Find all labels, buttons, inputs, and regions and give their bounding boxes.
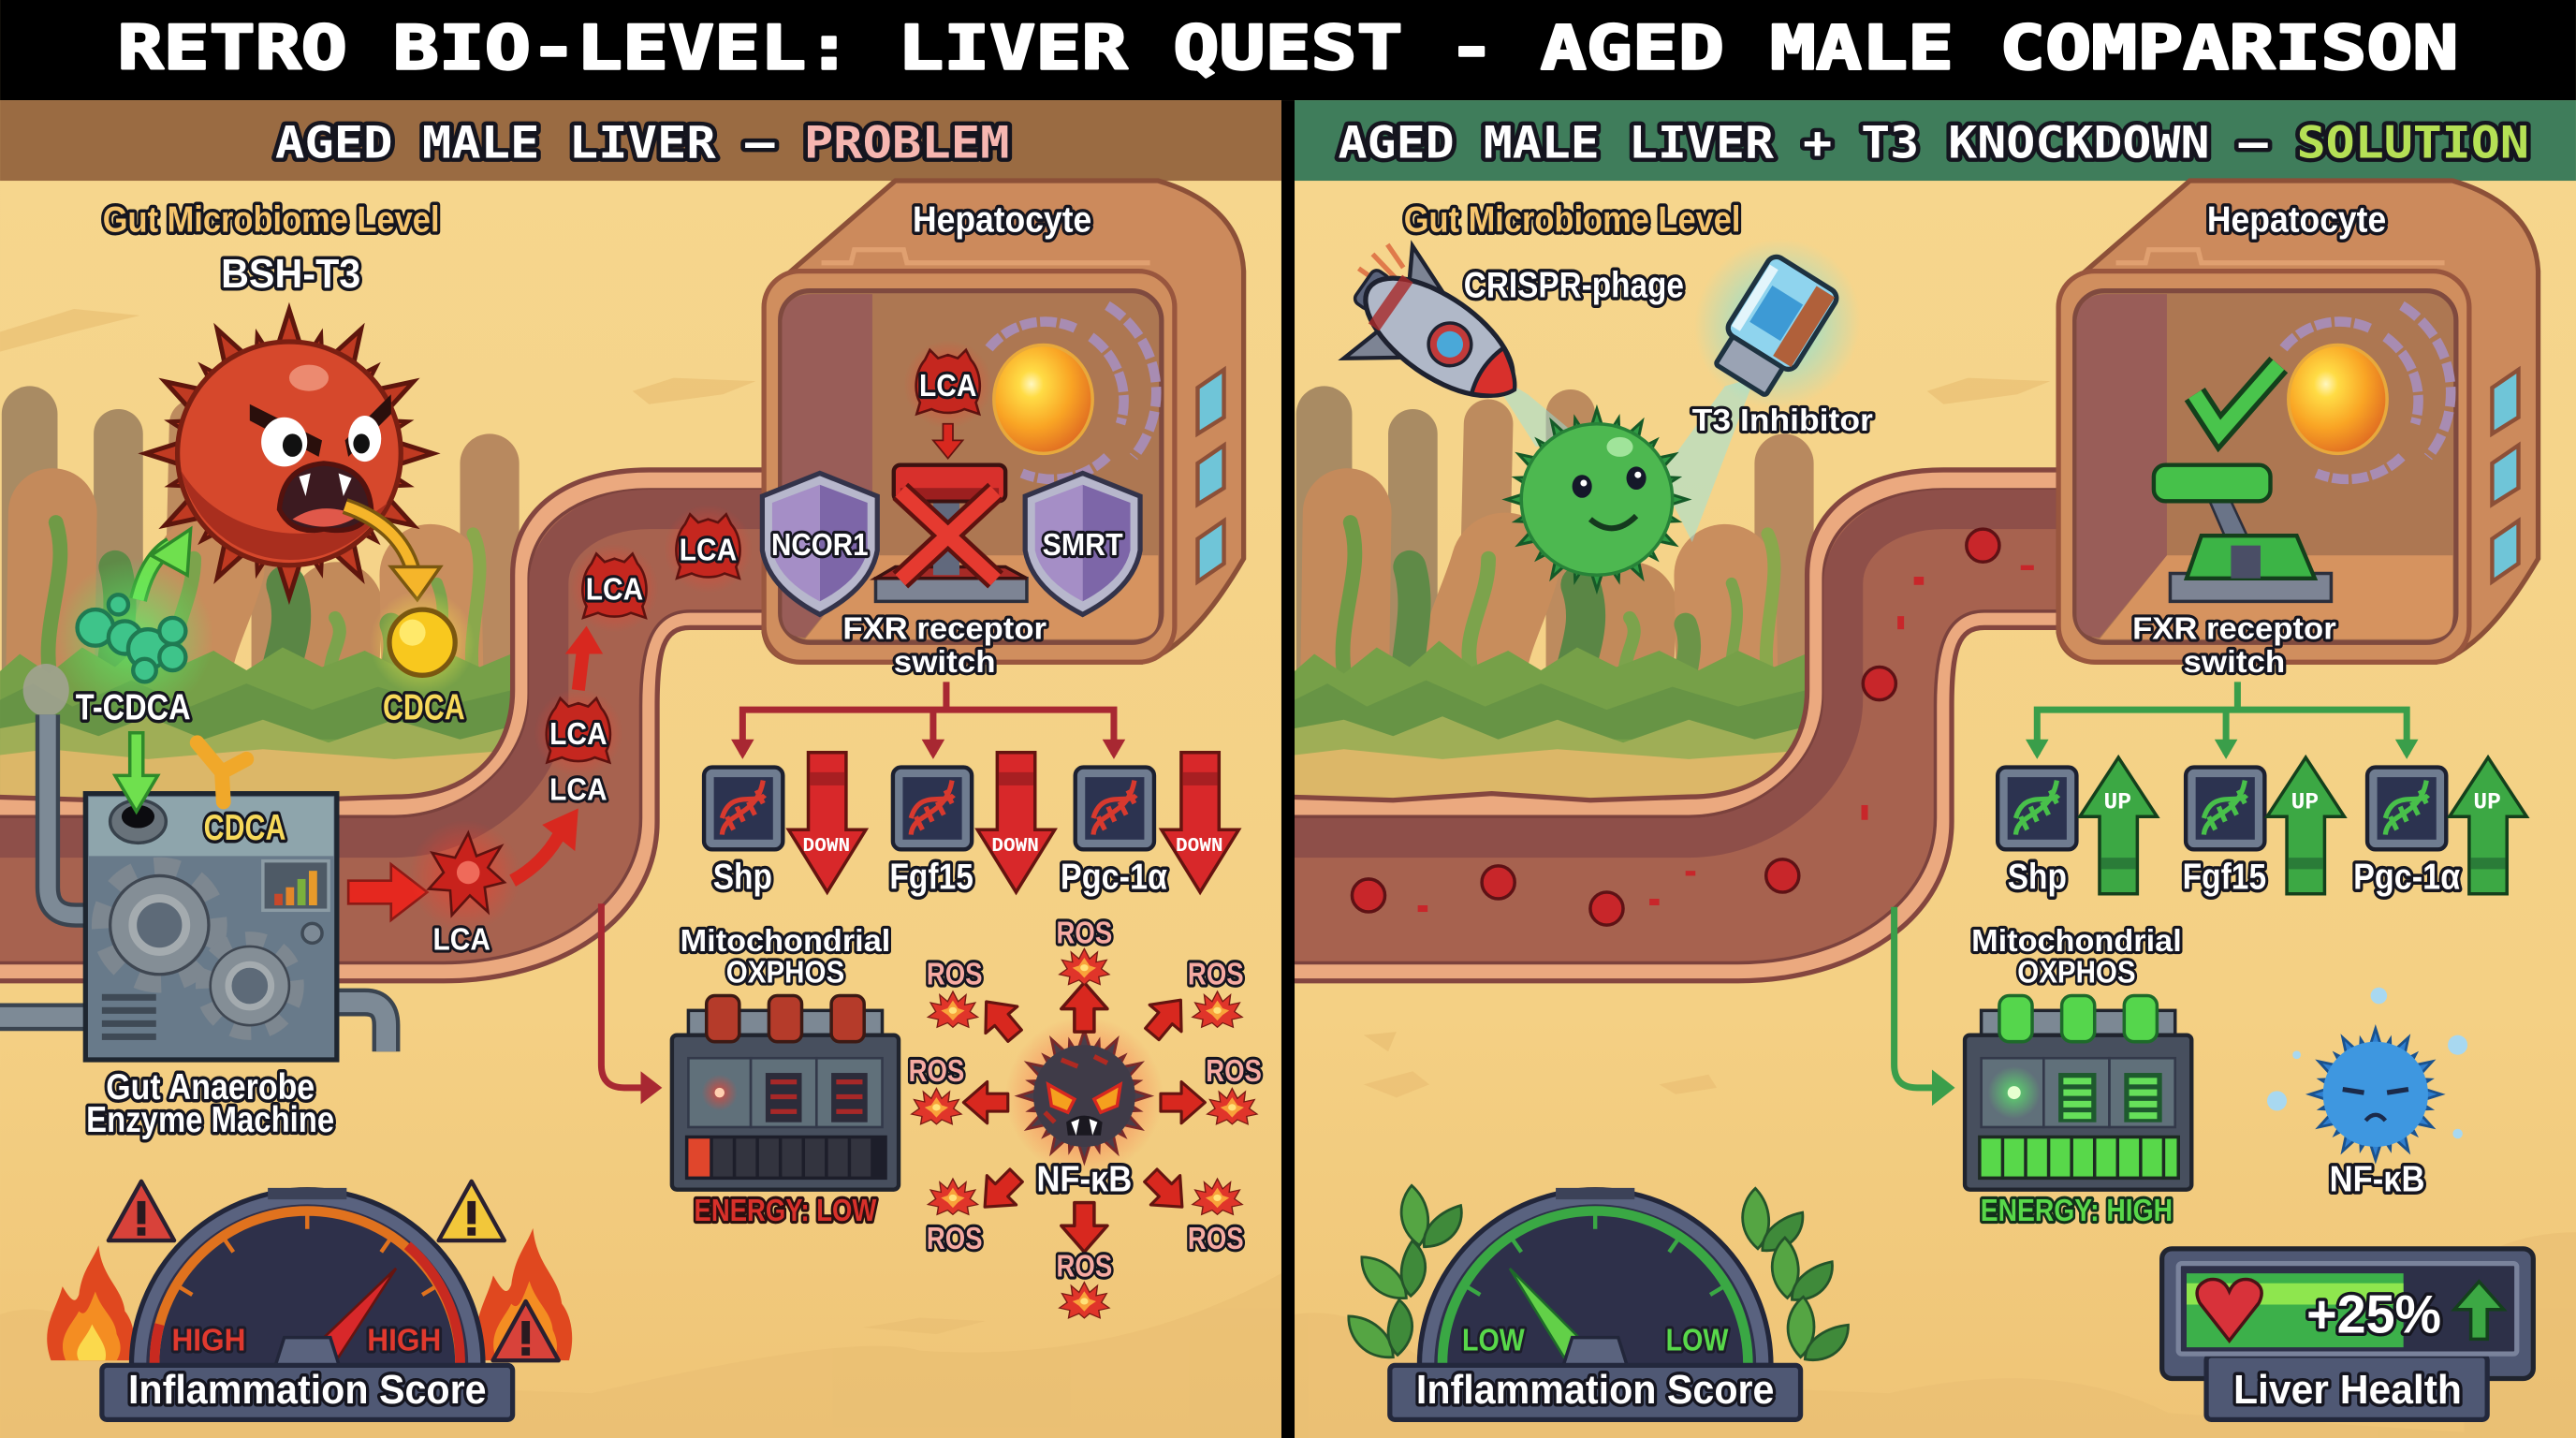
icon and label: LCA: [570, 544, 659, 633]
labels: ROS: ROS: [1057, 1250, 1112, 1284]
divider: [1281, 100, 1295, 1438]
arrow: machine to LCA: [348, 864, 427, 920]
title: RETRO BIO-LEVEL: LIVER QUEST - AGED MALE COMPARISON: [118, 14, 2458, 84]
arrows: FXR to genes: [2026, 682, 2418, 759]
icon: Shp gene: [1998, 768, 2076, 849]
label: CRISPR-phage: CRISPR-phage: [1464, 266, 1684, 306]
smoke: [23, 664, 69, 716]
arrow: Pgc-1a up: [2450, 757, 2526, 894]
icon: CRISPR-phage rocket: [1311, 228, 1548, 448]
hepatocyte building: [764, 181, 1244, 662]
label: FXR receptor switch: [2132, 612, 2336, 680]
panel header: solution: AGED MALE LIVER + T3 KNOCKDOWN – SOLUTION: [1339, 117, 2529, 169]
labels: ROS: ROS: [1188, 957, 1244, 991]
arrow: Pgc-1a down: [1162, 753, 1238, 892]
label: FXR receptor switch: FXR receptor: [2132, 612, 2336, 647]
arrow: bacterium to CDCA: [345, 506, 440, 600]
bursts: ROS: [912, 948, 1257, 1318]
label: energy low: ENERGY: LOW: [695, 1194, 877, 1228]
icon: happy green bacterium: [1494, 396, 1700, 603]
label: hepatocyte: Hepatocyte: [913, 199, 1091, 240]
icon: leaves: [1345, 1184, 1854, 1372]
label: FXR receptor switch: switch: [2183, 645, 2285, 680]
gauge: inflammation high: [102, 1188, 513, 1419]
labels: ROS: ROS: [927, 957, 983, 991]
labels: ROS: [909, 916, 1262, 1284]
label: T-CDCA: T-CDCA: [76, 688, 191, 728]
label: T3 inhibitor: T3 Inhibitor: [1692, 404, 1873, 438]
label: low right: LOW: [1666, 1324, 1729, 1358]
label: FXR receptor switch: FXR receptor: [842, 612, 1046, 647]
label: mitochondrial OXPHOS: Mitochondrial: [681, 924, 890, 959]
red arc ends: [154, 1245, 460, 1364]
labels: ROS: ROS: [927, 1222, 983, 1256]
arrow: Pgc-1a down: DOWN: [1176, 835, 1222, 858]
label: energy high: ENERGY: HIGH: [1981, 1194, 2173, 1228]
label: FXR receptor switch: [842, 612, 1046, 680]
icon: Pgc-1a gene: [2367, 768, 2446, 849]
label: CDCA on machine: CDCA: [204, 808, 285, 848]
label: mitochondrial OXPHOS: OXPHOS: [726, 956, 844, 990]
icon: Fgf15 gene: [2186, 768, 2264, 849]
arrow: Fgf15 up: [2267, 757, 2344, 894]
label: Fgf15: Fgf15: [2183, 857, 2266, 897]
label: NF-kB: NF-κB: [1036, 1159, 1132, 1199]
icon: Pgc-1a gene: [1076, 768, 1154, 849]
icon: active FXR switch: [2154, 465, 2331, 601]
gut terrain: [0, 414, 526, 805]
arrows: FXR to genes: [731, 682, 1125, 759]
value: plus 25 percent: +25%: [2306, 1284, 2441, 1344]
icon and label: LCA: LCA: [586, 573, 643, 608]
label: low left: LOW: [1462, 1324, 1525, 1358]
icon and label: LCA: [534, 688, 622, 777]
label: FXR receptor switch: switch: [894, 645, 996, 680]
panel header: problem: AGED MALE LIVER – PROBLEM: [275, 117, 1010, 169]
icon: sleepy blue NF-kB: [2267, 988, 2467, 1165]
labels: ROS: ROS: [909, 1054, 964, 1089]
icon: SMRT shield: SMRT: [1043, 528, 1123, 563]
arrow: Fgf15 down: DOWN: [991, 835, 1039, 858]
intestine tube: [1286, 470, 2067, 981]
label: BSH-T3: BSH-T3: [221, 251, 360, 297]
genes: down-regulated: [704, 753, 1238, 897]
arrow: health up: [2454, 1282, 2504, 1339]
label: CDCA: CDCA: [383, 688, 465, 728]
label: high left: HIGH: [171, 1324, 245, 1358]
arrow: T-CDCA into machine: [115, 733, 158, 812]
icon: gut anaerobe enzyme machine: [0, 664, 386, 1060]
labels: ROS: ROS: [1188, 1222, 1244, 1256]
icon: NCOR1 shield: [762, 473, 877, 614]
icon: NF-kB dark bacterium: [1005, 1017, 1164, 1175]
arrows: NF-kB to ROS: [963, 983, 1205, 1252]
arrow: Shp down: [788, 753, 866, 892]
icon: angry red bacterium BSH-T3: [139, 302, 440, 605]
label: mitochondrial OXPHOS: OXPHOS: [2017, 956, 2136, 990]
arrow: T-CDCA to bacterium: [138, 529, 191, 600]
icon: LCA star: [409, 820, 520, 932]
intestine tube: [0, 470, 772, 981]
label: LCA under star: LCA: [433, 922, 490, 957]
red cells in tube: [1352, 529, 2034, 925]
label: Pgc-1a: Pgc-1α: [2353, 857, 2460, 897]
labels: ROS: ROS: [1206, 1054, 1262, 1089]
arrow: Fgf15 up: UP: [2291, 790, 2319, 815]
yellow substrate: [198, 742, 246, 801]
gauge: inflammation low: [1390, 1188, 1801, 1419]
panel header: solution: [1295, 100, 2576, 181]
label: gut anaerobe enzyme machine: [86, 1067, 334, 1140]
label: inflammation score: Inflammation Score: [128, 1367, 487, 1413]
icon: flames and warnings: [47, 1181, 572, 1360]
hepatocyte building: [2058, 181, 2539, 662]
gut terrain: [1286, 414, 2067, 981]
icon and label: LCA: LCA: [549, 717, 607, 752]
icon: blocked FXR switch: [875, 465, 1027, 601]
icon and label: LCA: LCA: [680, 533, 737, 567]
sand patches: [0, 309, 2576, 1438]
needle: [317, 1269, 396, 1357]
icon: T-CDCA molecule: [56, 559, 213, 716]
icon: CDCA yellow ball: [370, 590, 475, 695]
icon: mitochondria panel low: [672, 996, 899, 1190]
label: gut microbiome level: Gut Microbiome Level: [1404, 199, 1741, 240]
genes: up-regulated: [1998, 757, 2526, 897]
arrow: Shp up: [2080, 757, 2157, 894]
label: mitochondrial OXPHOS: Mitochondrial: [1971, 924, 2182, 959]
labels: ROS: ROS: [1057, 916, 1112, 950]
arrow: LCA up the tube: [513, 808, 578, 881]
arrow: LCA to switch: [933, 424, 963, 459]
icon: mitochondria panel high: [1965, 996, 2191, 1190]
arrow: Pgc-1a up: UP: [2473, 790, 2501, 815]
label: high right: HIGH: [367, 1324, 441, 1358]
arrow: Shp down: DOWN: [803, 835, 850, 858]
icon: T3 inhibitor vial: [1662, 208, 1893, 440]
arrow: Shp up: UP: [2104, 790, 2131, 815]
icon: check mark: [2195, 365, 2278, 433]
icon: SMRT shield: [1025, 473, 1140, 614]
panel: solution: [1286, 100, 2576, 1419]
icon: Shp gene: [704, 768, 783, 849]
label: LCA without sprite: LCA: [549, 773, 607, 808]
arrow: Fgf15 down: [977, 753, 1055, 892]
ROS cluster: [909, 916, 1262, 1318]
liver health meter: [2162, 1249, 2533, 1419]
label: gut microbiome level: Gut Microbiome Level: [103, 199, 440, 240]
needle: [1510, 1269, 1586, 1357]
pipes: [48, 714, 92, 916]
title bar: [0, 0, 2576, 100]
label: gut anaerobe enzyme machine: Gut Anaerobe: [106, 1067, 315, 1108]
arrow: to mitochondrial panel: [601, 903, 662, 1104]
panel header: problem: [0, 100, 1281, 181]
label: Fgf15: Fgf15: [889, 857, 973, 897]
label: mitochondrial OXPHOS: [681, 924, 890, 990]
beam: phage and inhibitor to bacterium: [1486, 370, 1754, 542]
icon and label: LCA in hepatocyte: [903, 340, 992, 429]
panel: problem: [0, 100, 1281, 1419]
icon: heart: [2197, 1280, 2261, 1341]
label: liver health: Liver Health: [2233, 1367, 2462, 1413]
label: hepatocyte: Hepatocyte: [2207, 199, 2386, 240]
label: Shp: Shp: [2008, 857, 2067, 897]
arrow: to mitochondrial panel: [1895, 907, 1955, 1106]
icon: Fgf15 gene: [893, 768, 972, 849]
label: NF-kB: NF-κB: [2330, 1159, 2424, 1199]
label: gut anaerobe enzyme machine: Enzyme Machine: [86, 1100, 334, 1140]
label: mitochondrial OXPHOS: [1971, 924, 2182, 990]
icon and label: LCA: [664, 505, 753, 594]
icon and label: LCA in hepatocyte: LCA: [919, 369, 976, 404]
icon: NCOR1 shield: NCOR1: [771, 528, 869, 563]
label: inflammation score: Inflammation Score: [1416, 1367, 1774, 1413]
arrow: LCA up: [565, 626, 603, 690]
label: Shp: Shp: [713, 857, 772, 897]
label: Pgc-1a: Pgc-1α: [1061, 857, 1167, 897]
